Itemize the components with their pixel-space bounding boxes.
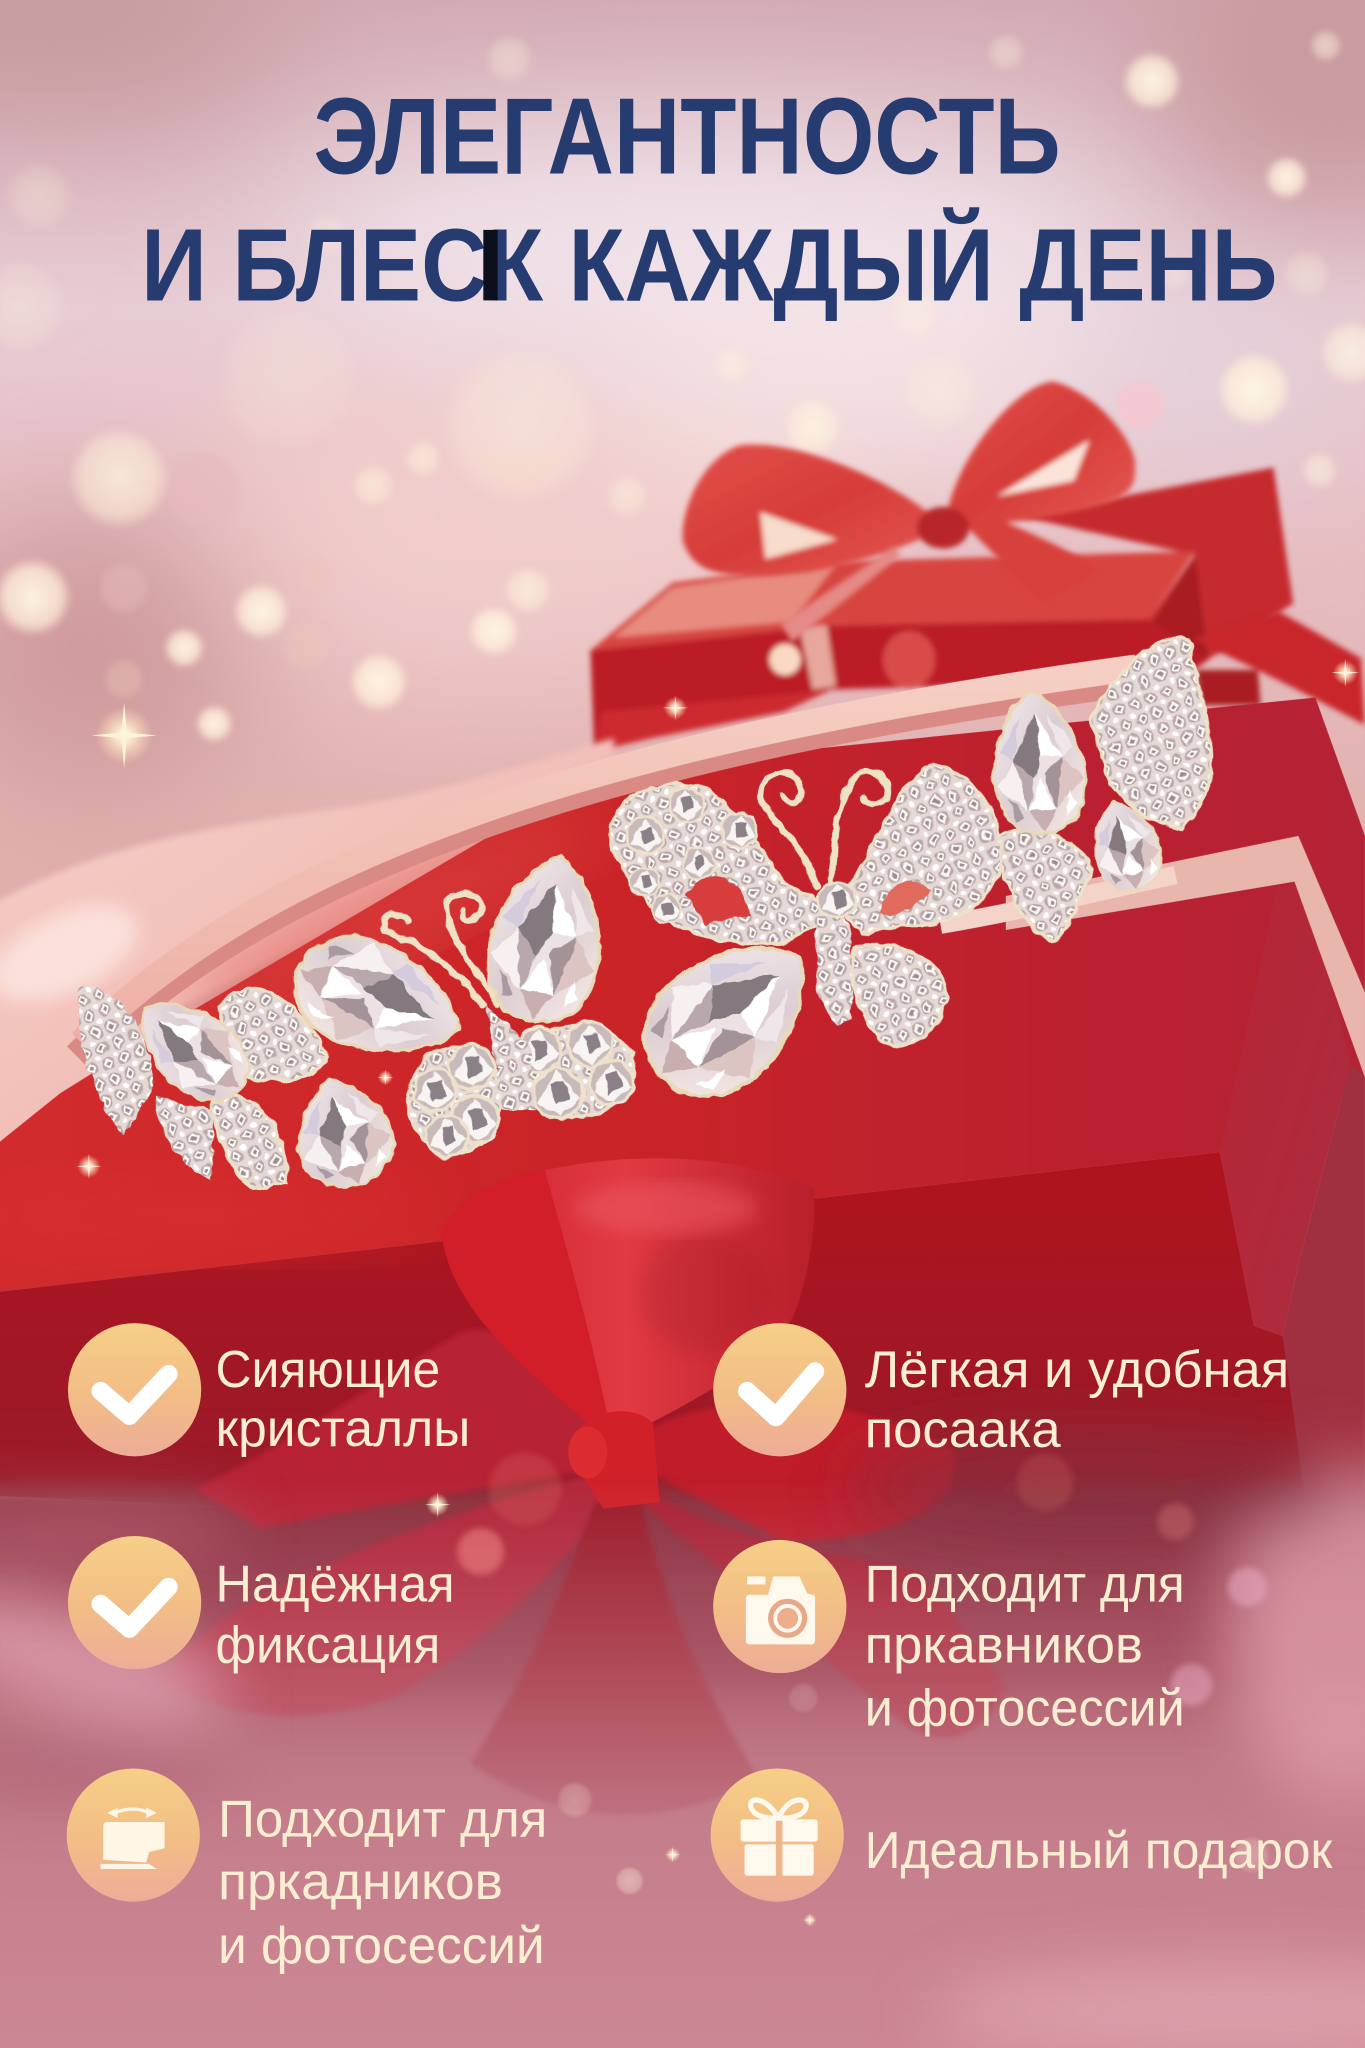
feature: надёжная фиксация: [68, 1536, 455, 1675]
top loops: [545, 1158, 814, 1442]
front satin bow: [0, 1158, 1365, 1829]
feature: сияющие кристаллы: [68, 1323, 470, 1458]
back gift box: [590, 468, 1293, 751]
text: и фотосессий: [865, 1679, 1185, 1737]
text: посаака: [865, 1401, 1062, 1459]
background bokeh lights: [0, 30, 1365, 742]
text: [865, 1341, 1289, 1459]
tiara headband: [78, 667, 1176, 1058]
text: Надёжная: [216, 1555, 455, 1613]
text: пркавников: [865, 1617, 1143, 1675]
text: [216, 1555, 455, 1675]
title: ЭЛЕГАНТНОСТЬ: [314, 76, 1061, 197]
feature: подходит для праздников, left: [67, 1768, 547, 1975]
text: Подходит для: [865, 1555, 1185, 1613]
text: Лёгкая и удобная: [865, 1341, 1289, 1399]
icon: check: [713, 1323, 846, 1456]
text: и фотосессий: [218, 1917, 545, 1975]
back ribbon bow: [683, 381, 1365, 725]
left wing and tails: [157, 1330, 1006, 1814]
feature: идеальный подарок: [711, 1768, 1333, 1902]
large gems: [477, 847, 615, 1031]
feature: подходит для праздников, right: [713, 1540, 1185, 1737]
icon: check: [68, 1323, 201, 1456]
icon: band on box: [67, 1768, 200, 1902]
text: Подходит для: [218, 1790, 547, 1848]
feature: лёгкая и удобная посадка: [713, 1323, 1289, 1459]
text: [216, 1341, 470, 1458]
text: пркадников: [218, 1853, 503, 1911]
text: кристаллы: [216, 1400, 470, 1458]
second butterfly clusters: [520, 1025, 635, 1117]
pave wings: large butterfly: [610, 784, 836, 944]
icon: gift: [711, 1768, 844, 1902]
text: Сияющие: [216, 1341, 440, 1399]
text: [218, 1790, 547, 1975]
box ribbon right: [1006, 836, 1365, 1078]
shadow under box: [0, 1489, 1365, 1829]
large stones: [627, 818, 664, 854]
left clusters: [219, 989, 328, 1080]
icon: check: [68, 1536, 201, 1669]
text: [865, 1555, 1185, 1737]
foreground sparkles: [76, 659, 1359, 1927]
title: [141, 76, 1277, 322]
box front face: [0, 1152, 1313, 1554]
bottom pink silk overlay: [0, 1430, 1365, 2048]
text: Идеальный подарок: [865, 1822, 1333, 1880]
wing openings: [686, 877, 751, 925]
antennae: [383, 773, 888, 1006]
bow knot: [575, 1411, 660, 1509]
silk drape left: [0, 738, 614, 1176]
text: фиксация: [216, 1617, 440, 1675]
icon: camera: [713, 1540, 846, 1673]
tiara jewellery: [78, 638, 1211, 1197]
box side face: [1220, 882, 1351, 1336]
front gift box: [0, 697, 1365, 1567]
box top face: [0, 697, 1365, 1293]
